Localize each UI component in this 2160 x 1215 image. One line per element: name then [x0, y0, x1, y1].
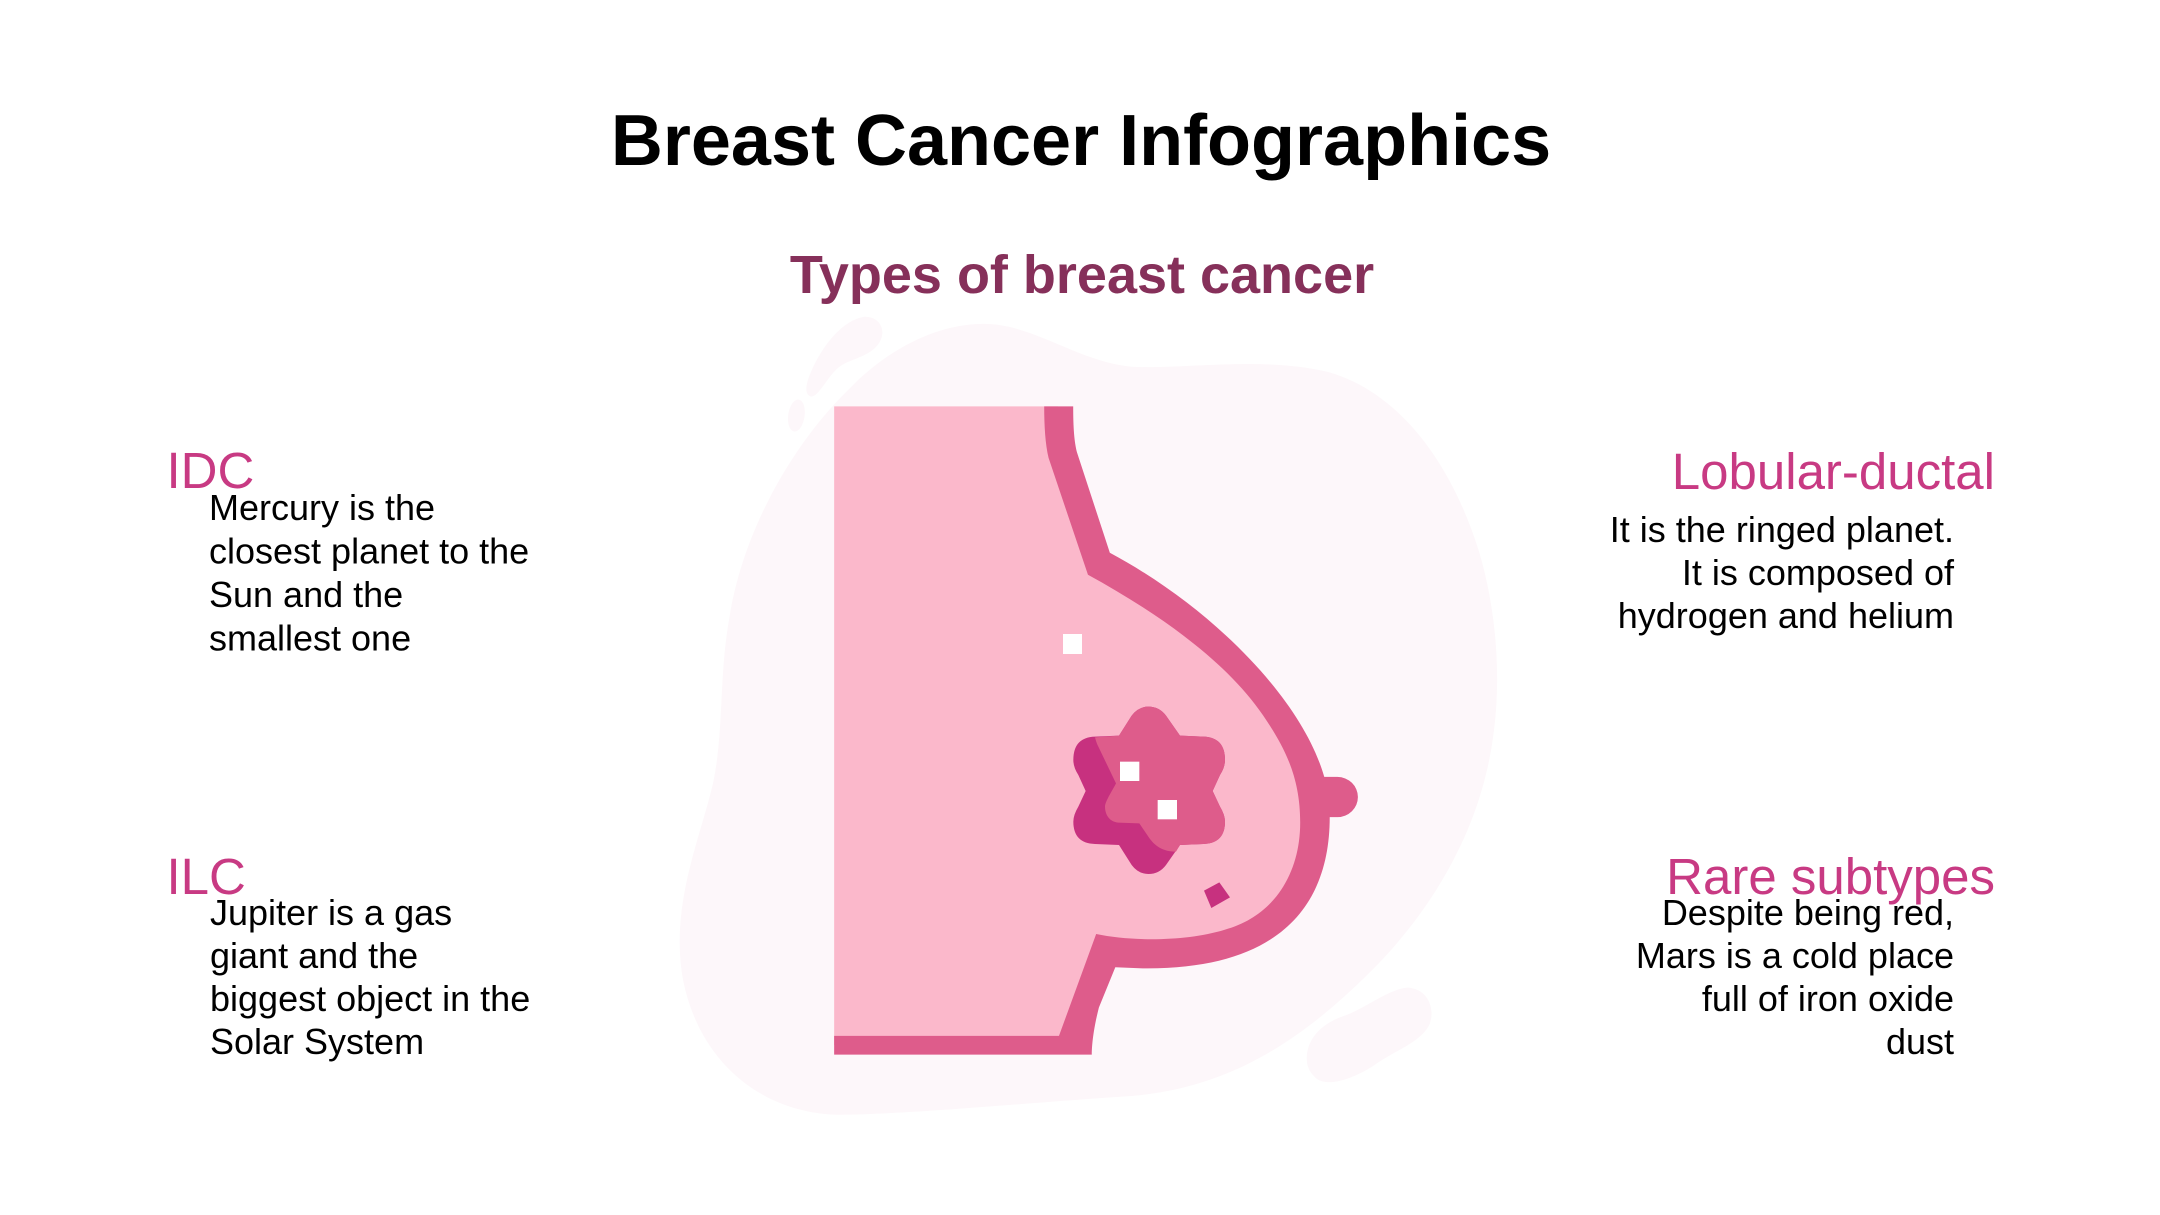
- heading: Lobular-ductal: Lobular-ductal: [1672, 443, 1995, 500]
- text: Rare subtypes description: Mars is a cold place: [1636, 935, 1954, 976]
- text: Lobular-ductal description: [1610, 509, 1955, 636]
- text: ILC description: giant and the: [210, 935, 418, 976]
- text: Lobular-ductal description: It is the ringed planet.: [1610, 509, 1954, 550]
- breast outline: [834, 406, 1358, 1055]
- text: IDC description: closest planet to the: [209, 530, 529, 572]
- background blobs: [680, 317, 1497, 1115]
- text: IDC description: Mercury is the: [209, 487, 435, 528]
- text: ILC description: [210, 892, 530, 1062]
- text: Lobular-ductal description: It is composed of: [1682, 552, 1955, 593]
- tumour: [1073, 707, 1230, 908]
- text: ILC description: biggest object in the: [210, 978, 530, 1019]
- heading: ILC: ILC: [166, 848, 246, 905]
- subtitle: Types of breast cancer: [790, 245, 1374, 305]
- text: IDC description: [209, 487, 529, 658]
- icon: breast illustration: [834, 406, 1358, 1055]
- heading: Rare subtypes: Rare subtypes: [1666, 848, 1995, 905]
- heading: IDC: IDC: [166, 442, 254, 499]
- block: Rare subtypes: [1636, 848, 1995, 1062]
- text: Rare subtypes description: dust: [1886, 1021, 1954, 1062]
- text: Rare subtypes description: Despite being red,: [1662, 892, 1954, 933]
- text: ILC description: Jupiter is a gas: [210, 892, 452, 933]
- text: ILC description: Solar System: [210, 1021, 424, 1062]
- block: ILC: [166, 848, 530, 1062]
- text: IDC description: Sun and the: [209, 574, 403, 615]
- breast fill: [834, 406, 1312, 1045]
- text: Rare subtypes description: [1636, 892, 1954, 1062]
- block: IDC: [166, 442, 529, 658]
- text: Lobular-ductal description: hydrogen and helium: [1618, 595, 1954, 636]
- text: Rare subtypes description: full of iron oxide: [1702, 978, 1954, 1019]
- block: Lobular-ductal: [1610, 443, 1995, 636]
- text: IDC description: smallest one: [209, 618, 411, 658]
- white cell: [1063, 634, 1082, 654]
- title: Breast Cancer Infographics: [611, 101, 1551, 181]
